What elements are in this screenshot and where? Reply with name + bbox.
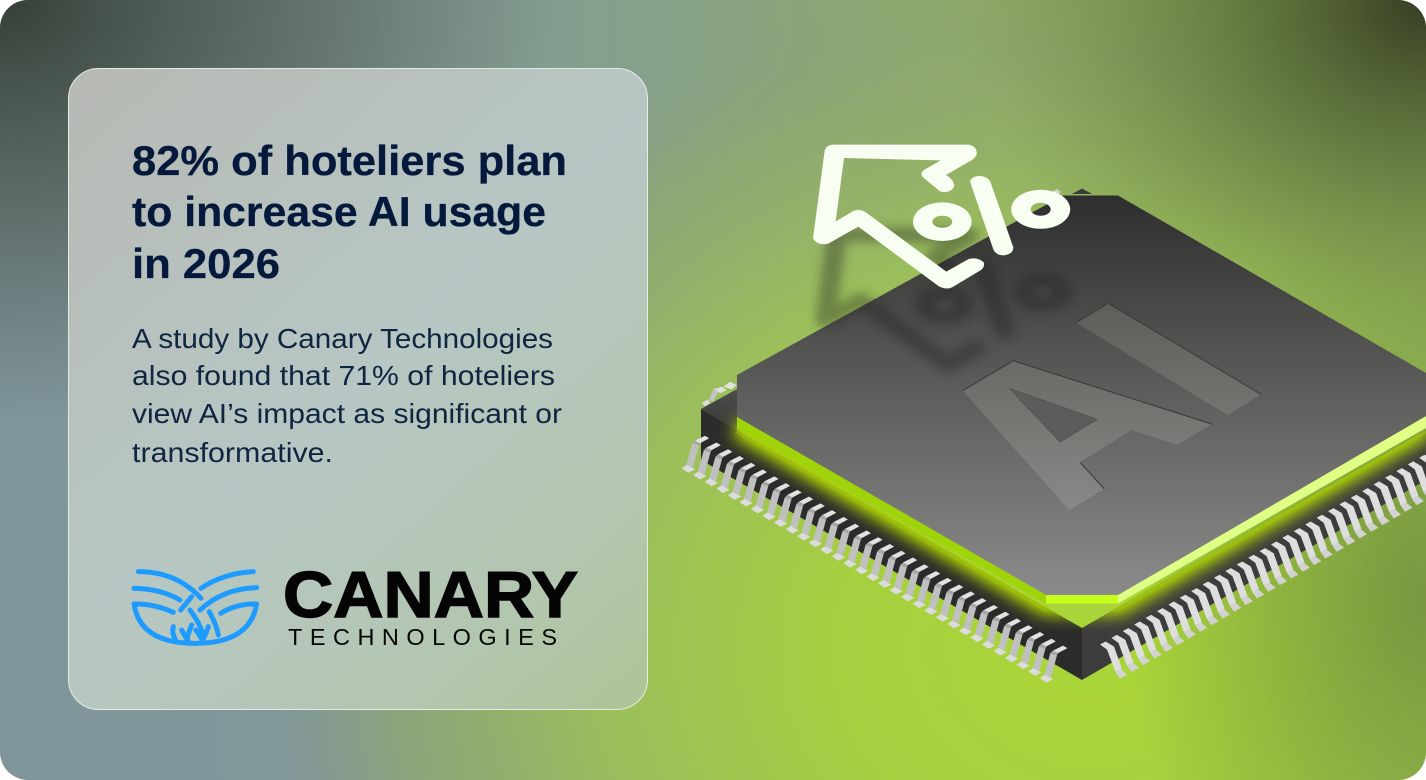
arrow shadow [815,228,1072,372]
heading: to increase AI usage [132,188,546,235]
neon edge strip [737,416,1426,604]
back pins [702,188,1092,406]
body text: view AI’s impact as significant or [132,398,562,429]
chip top surface [737,196,1426,595]
logo: Canary Technologies [132,569,578,646]
body text: transformative. [132,437,333,468]
heading: 82% of hoteliers plan [132,137,567,184]
wordmark [285,570,578,645]
body text [132,323,562,468]
icon: white arrow with percent sign [813,145,1070,289]
body text: also found that 71% of hoteliers [132,360,555,391]
illustration: AI chip [682,145,1426,683]
wordmark: CANARY [283,558,578,631]
right side pins [1100,455,1426,678]
chip body faces [701,389,1426,680]
icon: canary leaf mark [134,572,257,643]
heading: in 2026 [132,240,280,287]
glass card panel [68,68,648,710]
AI lettering [963,303,1261,510]
body text: A study by Canary Technologies [132,323,553,354]
left side pins [682,436,1067,683]
green glow under edge [737,426,1426,608]
wordmark: TECHNOLOGIES [288,624,557,650]
heading [132,144,564,279]
